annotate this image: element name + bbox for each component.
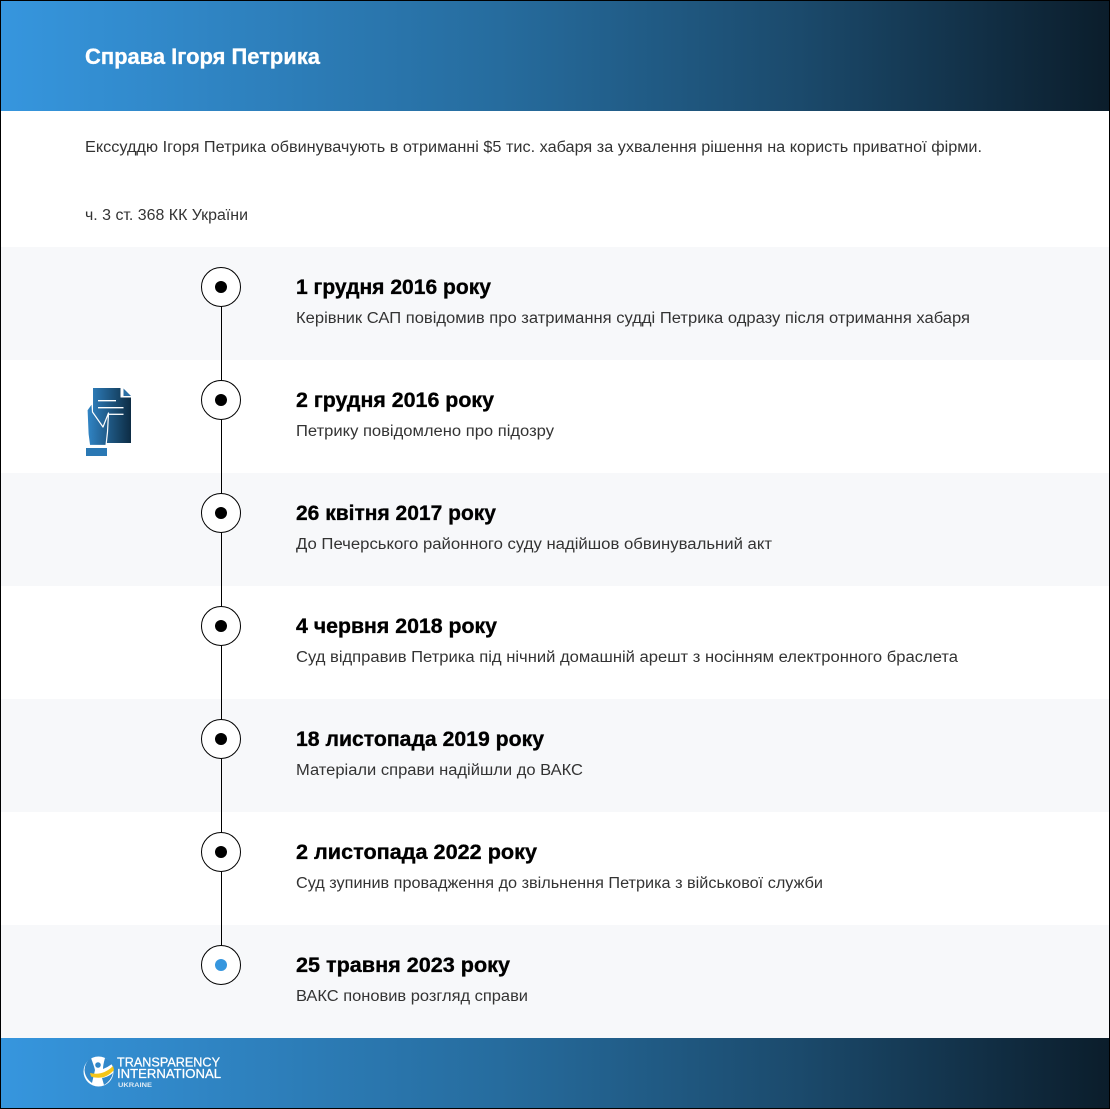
timeline event: 1 December 2016: 1 грудня 2016 року xyxy=(296,275,491,299)
timeline event: 2 November 2022: Суд зупинив провадження до звільнення Петрика з військової служби xyxy=(296,875,823,892)
timeline event: 18 November 2019: 18 листопада 2019 року xyxy=(296,727,544,751)
timeline event: 4 June 2018: 4 червня 2018 року xyxy=(296,614,497,638)
timeline event: 4 June 2018: Суд відправив Петрика під нічний домашній арешт з носінням електронного браслета xyxy=(296,649,958,666)
text block: criminal code article: ч. 3 ст. 368 КК України xyxy=(85,207,248,224)
timeline event: 26 April 2017: До Печерського районного суду надійшов обвинувальний акт xyxy=(296,536,772,553)
timeline event: 26 April 2017 xyxy=(202,494,772,553)
panel: row backgrounds xyxy=(1,247,1109,1038)
timeline event: 25 May 2023: ВАКС поновив розгляд справи xyxy=(296,988,528,1005)
timeline axis xyxy=(220,287,222,965)
timeline event: 25 May 2023 xyxy=(202,946,528,1005)
title: Справа Ігоря Петрика xyxy=(85,44,321,69)
timeline event: 18 November 2019 xyxy=(202,720,583,779)
text block: case summary: Екссуддю Ігоря Петрика обвинувачують в отриманні $5 тис. хабаря за ухвалення рішення на користь приватної фірми. xyxy=(85,139,982,156)
logo: Transparency International Ukraine: INTERNATIONAL xyxy=(117,1067,221,1081)
panel: footer band xyxy=(1,1038,1109,1108)
timeline event: 2 December 2016: 2 грудня 2016 року xyxy=(296,388,494,412)
panel: header band xyxy=(1,1,1109,111)
logo: Transparency International Ukraine xyxy=(84,1056,221,1089)
logo: Transparency International Ukraine: UKRAINE xyxy=(118,1082,153,1089)
icon: hand holding document xyxy=(86,388,131,456)
timeline event: 25 May 2023: 25 травня 2023 року xyxy=(296,953,510,977)
timeline event: 2 December 2016: Петрику повідомлено про підозру xyxy=(296,423,554,440)
timeline event: 1 December 2016 xyxy=(202,268,970,327)
timeline event: 2 November 2022: 2 листопада 2022 року xyxy=(296,840,537,864)
timeline event: 2 November 2022 xyxy=(202,832,823,892)
timeline event: 18 November 2019: Матеріали справи надійшли до ВАКС xyxy=(296,762,583,779)
timeline event: 4 June 2018 xyxy=(202,606,958,666)
logo: Transparency International Ukraine: TRANSPARENCY xyxy=(117,1056,221,1070)
timeline event: 1 December 2016: Керівник САП повідомив про затримання судді Петрика одразу після отримання хабаря xyxy=(296,310,970,327)
timeline event: 26 April 2017: 26 квітня 2017 року xyxy=(296,501,496,525)
timeline event: 2 December 2016 xyxy=(202,380,554,440)
